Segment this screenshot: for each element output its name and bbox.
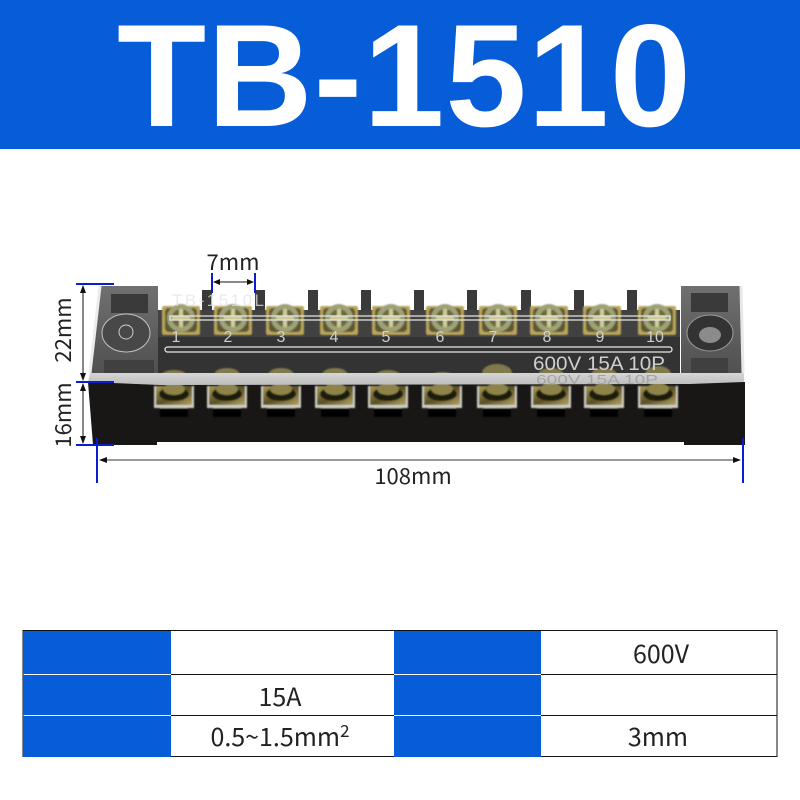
terminal numbers: 10 bbox=[646, 329, 664, 346]
terminal numbers: 9 bbox=[596, 329, 605, 346]
terminal numbers bbox=[172, 329, 664, 346]
title banner bbox=[0, 0, 800, 157]
blue label cells, column 2 bbox=[394, 631, 541, 757]
cover model mark: TB-1510L bbox=[172, 291, 264, 310]
black base bbox=[88, 382, 745, 445]
dimension: 16mm: 16mm bbox=[46, 382, 78, 448]
product photo: terminal block bbox=[88, 286, 745, 445]
dimension: 7mm: 7mm bbox=[207, 245, 259, 277]
cover front strip bbox=[88, 373, 744, 385]
screws seen through cover lower row bbox=[161, 364, 671, 382]
transparent cover body bbox=[157, 310, 680, 373]
upper screws bbox=[162, 304, 676, 335]
cover rating text: 600V 15A 10P bbox=[533, 354, 665, 375]
terminal numbers: 6 bbox=[436, 329, 445, 346]
lower terminals bbox=[154, 383, 678, 417]
cover ridges bbox=[165, 316, 672, 352]
dimension: 7mm bbox=[207, 245, 259, 293]
dimension: 108mm bbox=[97, 438, 743, 491]
rating text reflection on strip: 600V 15A 10P bbox=[536, 372, 658, 387]
blue label cells, column 1 bbox=[23, 631, 171, 757]
terminal numbers: 5 bbox=[382, 329, 391, 346]
right end block bbox=[681, 286, 744, 373]
terminal numbers: 7 bbox=[489, 329, 498, 346]
dimension: 22mm: 22mm bbox=[46, 297, 78, 363]
terminal numbers: 4 bbox=[330, 329, 339, 346]
specification table bbox=[23, 630, 777, 757]
dimension: 22mm bbox=[46, 284, 114, 382]
table values: 15A bbox=[259, 678, 302, 714]
table values bbox=[210, 635, 690, 754]
dimension: 108mm: 108mm bbox=[374, 459, 452, 491]
table values: 600V bbox=[633, 635, 690, 671]
terminal numbers: 2 bbox=[224, 329, 233, 346]
terminal numbers: 1 bbox=[172, 329, 181, 346]
divider fins bbox=[202, 290, 637, 314]
left end block bbox=[90, 286, 158, 373]
table values: 0.5~1.5mm bbox=[210, 718, 340, 754]
dimension: 16mm bbox=[46, 382, 114, 448]
terminal numbers: 3 bbox=[277, 329, 286, 346]
table values: 3mm bbox=[628, 718, 688, 754]
terminal numbers: 8 bbox=[543, 329, 552, 346]
table values: 2 bbox=[340, 717, 350, 742]
